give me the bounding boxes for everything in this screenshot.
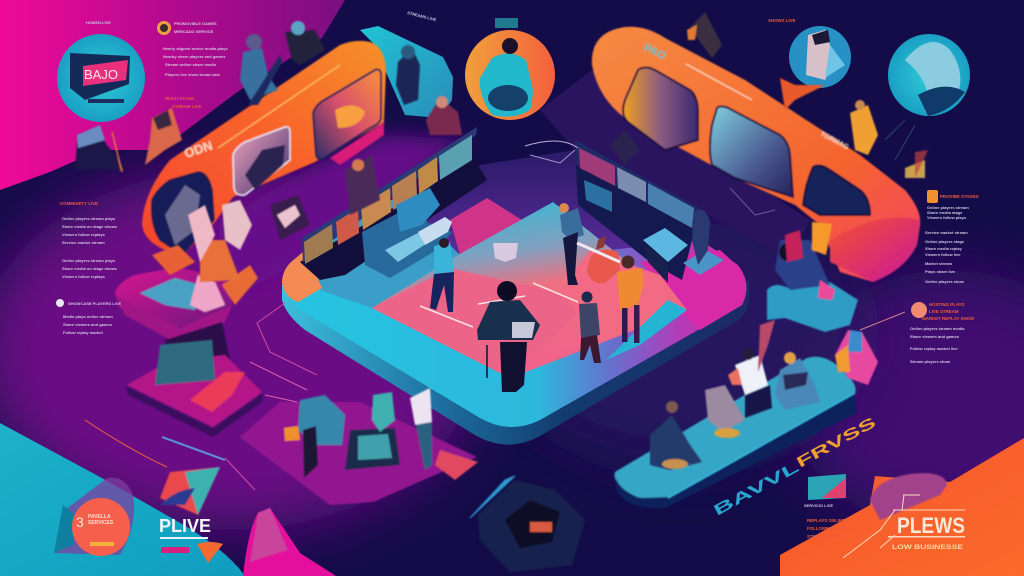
bench side — [615, 393, 857, 508]
floor right teal stripe — [606, 300, 687, 360]
monitor stand — [88, 99, 124, 103]
bus window: right — [313, 70, 381, 159]
lower figure sleeve — [848, 330, 862, 352]
console screen 3 — [361, 188, 391, 230]
bench light — [668, 393, 855, 498]
text block: right first — [925, 190, 979, 284]
text block: left mid first: Online players stream plays — [62, 216, 116, 221]
platform rim — [282, 280, 749, 445]
white panel — [418, 217, 452, 245]
orange box — [284, 426, 300, 441]
window figure: middle — [245, 145, 285, 190]
text block: left mid first: Share media on stage shows — [62, 224, 118, 229]
icon: bubble top-left monitor — [57, 34, 145, 122]
lower tray — [127, 355, 262, 427]
panel: left machine — [115, 265, 263, 437]
text: bottom left badge: 3 — [76, 514, 84, 530]
bus lettering two: TORMAG — [819, 131, 850, 152]
text block: right second: HOSTING PLAYS — [929, 302, 965, 307]
console frame — [575, 140, 703, 230]
lower device — [155, 340, 215, 385]
lower bus red glow — [330, 122, 384, 165]
person head — [502, 38, 518, 54]
icon: gem bottom — [250, 508, 288, 562]
person dark — [303, 426, 318, 478]
text block: left mid second: Media plays online stream — [63, 314, 113, 319]
desk unit — [362, 212, 452, 278]
text block: top-left info: Nearly aligned sevice media plays — [163, 46, 228, 51]
title: PLIVE logo: PLIVE — [159, 516, 211, 536]
icon: bubble top-right figure — [789, 26, 851, 88]
text block: bottom right panel — [804, 474, 851, 539]
text block: right first: Online players show — [925, 279, 965, 284]
text block: left mid second: SHOWCASE PLAYERS LIVE — [68, 301, 122, 306]
red slab — [190, 372, 245, 412]
text block: left mid first: COMMUNITY LIVE — [60, 201, 98, 206]
figure teal bus — [396, 48, 420, 105]
text block: left mid second: Share viewers and games — [63, 322, 113, 327]
red tile — [435, 450, 478, 480]
monitor screen — [83, 60, 128, 86]
person legs — [416, 422, 432, 470]
console screen 4 — [392, 171, 417, 210]
icon: people on bench — [650, 348, 820, 470]
text block: left mid second: Follow replay market — [63, 330, 103, 335]
floor white square — [493, 243, 518, 262]
text block: right first: Viewers follow live — [925, 252, 961, 257]
panel: console right — [575, 140, 724, 283]
console screen 3 — [648, 183, 694, 228]
text block: left mid first: Online players stream plays — [62, 258, 116, 263]
person lap — [488, 85, 528, 111]
text: bottom left badge — [54, 478, 134, 556]
pink limb — [818, 280, 835, 300]
text block: right second: MARKET REPLAY SHOW — [922, 316, 975, 321]
title: PLIVE logo — [159, 516, 223, 563]
bus window: middle — [710, 106, 793, 197]
icon: performer at piano — [477, 281, 540, 392]
teal bag — [298, 395, 345, 445]
panel: purple glow bottom center — [500, 200, 860, 460]
text: bottom left badge: PAVELLA — [88, 514, 111, 520]
arrow: connector lines — [85, 120, 915, 490]
chart: central platform — [282, 150, 749, 445]
console screen 5 — [418, 157, 438, 194]
tray front — [115, 295, 232, 345]
bus window: middle — [233, 127, 290, 195]
text block: bottom right panel: REPLAYS ONLINE — [807, 518, 845, 523]
title: PLEWS logo: PLEWS — [897, 513, 965, 538]
icon: bubble far-right — [888, 34, 970, 116]
big monitor — [396, 188, 440, 232]
text block: right second: Stream players show — [910, 359, 951, 364]
monitor label: BAJO — [84, 67, 118, 82]
icon: person teal left — [430, 238, 454, 312]
text block: right second — [910, 302, 975, 364]
icon: small device top center — [495, 18, 518, 28]
icon: person orange shirt — [617, 256, 644, 343]
bus window: far — [803, 166, 870, 215]
panel: left orange bus — [142, 41, 386, 258]
monitor — [70, 53, 130, 100]
figure torso — [775, 240, 830, 290]
panel: orange bottom-right corner — [780, 438, 1024, 576]
side step — [683, 250, 724, 275]
figure head — [779, 243, 797, 261]
icon: central bottom machine — [470, 476, 585, 572]
platform magenta right — [640, 250, 747, 330]
icon: figures near left crowd — [152, 155, 380, 282]
panel: teal bus top — [360, 26, 453, 118]
icon: right seated blue figure — [758, 222, 878, 385]
text block: top-left info: Stream online share media — [165, 62, 217, 67]
text block: top-left info: Players live show broad cast — [165, 72, 220, 77]
text: top labels: STREAMS LIVE — [407, 10, 437, 22]
text block: top-left info — [157, 21, 228, 109]
platform orange corner — [282, 250, 322, 302]
console box — [645, 245, 668, 283]
monitor screen — [358, 434, 392, 460]
text: floor lettering — [711, 414, 879, 519]
text block: right second: Share viewers and games — [910, 334, 960, 339]
text block: right first: Market stream — [925, 261, 953, 266]
floor white marks — [420, 283, 578, 327]
platform back — [400, 150, 740, 360]
text block: left mid first — [60, 201, 118, 279]
panel: purple crowd area under left bus — [215, 135, 470, 295]
text block: top-left info: MULTI STAGE — [165, 96, 194, 101]
platform floor — [372, 202, 687, 378]
text: top labels — [407, 10, 796, 23]
text: floor lettering: FRVSS — [794, 414, 879, 471]
icon: person grey — [579, 292, 601, 363]
text block: bottom right panel: STREAM BOARD — [807, 534, 843, 539]
panel: console left — [300, 127, 487, 280]
person near console — [692, 210, 710, 265]
red seat — [785, 230, 803, 262]
title: PLEWS logo: LOW BUSINESSE — [892, 545, 963, 551]
lower figure orange — [835, 345, 850, 372]
icon: coral chair on stage — [577, 236, 620, 283]
person torso — [480, 53, 533, 117]
person white — [410, 388, 432, 425]
console screen 2 — [336, 208, 359, 245]
figure pink — [426, 98, 462, 135]
icon: figures top right — [610, 12, 928, 178]
text block: left mid second — [56, 299, 122, 335]
panel: purple glow right — [790, 270, 1024, 530]
console desk — [643, 228, 688, 262]
bus lettering: PAO — [642, 42, 668, 63]
floor front wedge — [372, 268, 590, 378]
icon: person back stage — [559, 203, 584, 285]
text block: right first: PROVIBE STAGES — [940, 194, 979, 199]
panel: purple blob behind logo — [870, 473, 947, 520]
icon: bubble top-center person — [465, 30, 555, 120]
orange cushions — [222, 265, 258, 305]
figure teal bus head — [401, 45, 415, 59]
text block: top-left info: STREAM LIVE — [172, 104, 202, 109]
icon: gem left — [160, 467, 220, 515]
text block: right first: Viewers follow plays — [927, 215, 967, 220]
connector limb — [758, 320, 775, 372]
text block: right second: LIVE STREAM — [929, 309, 959, 314]
text block: top-left info: MERCADO SERVICE — [174, 29, 214, 34]
platform left teal — [305, 195, 460, 308]
panel: dark wedge behind right bus — [540, 70, 810, 260]
platform top — [282, 240, 746, 427]
bus highlight — [686, 64, 752, 100]
console screen 6 — [439, 135, 472, 180]
floor magenta back — [450, 198, 525, 255]
tray interior — [140, 278, 200, 310]
text: top labels: SHOWS LIVE — [768, 18, 796, 23]
console screen 2 — [617, 167, 646, 202]
console screen 1 — [304, 224, 333, 264]
panel: lower left table — [240, 388, 478, 505]
console frame — [302, 127, 477, 262]
pink lower body — [830, 218, 920, 282]
person teal — [372, 392, 395, 432]
text block: right second: Follow replay market live — [910, 346, 958, 351]
text: bottom left badge: SERVICES — [88, 520, 114, 526]
panel: teal bottom-left corner — [0, 423, 245, 576]
floor right pink — [560, 250, 687, 342]
text block: right first: Plays share live — [925, 269, 956, 274]
console stand — [576, 165, 695, 280]
window figure: right — [335, 105, 365, 128]
console lower — [584, 180, 612, 212]
person gun — [240, 48, 278, 100]
text block: right first: Share media stage — [927, 210, 963, 215]
column — [165, 322, 230, 365]
lower figure — [835, 330, 878, 385]
text block: bottom right panel: SERVICIO LIVE — [804, 503, 833, 508]
bus highlight — [218, 65, 340, 148]
text: floor lettering: BAVVL — [711, 459, 802, 519]
panel: magenta bottom patch — [243, 508, 336, 576]
panel: magenta top-left corner — [0, 0, 345, 190]
text block: left mid first: Viewers follow replays — [62, 232, 106, 237]
text block: right first: Service market stream — [925, 230, 968, 235]
orange limb — [812, 222, 832, 255]
console screen 1 — [579, 148, 615, 186]
pink figure — [190, 275, 225, 312]
lower tray edge — [126, 386, 263, 437]
icon: figure below bubble — [75, 125, 125, 172]
text block: right first: Online players stream — [927, 205, 969, 210]
bus window: left — [152, 172, 214, 255]
text block: left mid first: Viewers follow replays — [62, 274, 106, 279]
monitor — [345, 428, 400, 470]
text block: bottom right panel: FOLLOWERS MEDIA — [807, 526, 851, 531]
person face — [145, 108, 182, 165]
person cap — [285, 30, 325, 65]
text block: right second: Online players stream media — [910, 326, 965, 331]
icon: seated figures upper left — [145, 21, 462, 165]
person face dark — [153, 110, 172, 130]
text block: right first: Share media replay — [925, 246, 962, 251]
text block: left mid first: Service market stream — [62, 240, 105, 245]
text block: top-left info: Nearby share players and games — [163, 54, 226, 59]
text block: right first: Online players stage — [925, 239, 965, 244]
bus window: near — [623, 68, 698, 150]
panel: right orange bus — [592, 27, 920, 282]
text block: left mid first: Share media on stage shows — [62, 266, 118, 271]
desk top — [385, 233, 432, 262]
title: PLEWS logo — [843, 495, 965, 558]
console stand — [300, 160, 487, 280]
text block: top-left info: PROMOVIBLE GAMES — [174, 21, 217, 26]
window figure: left — [165, 185, 200, 245]
bus lettering: ODN — [182, 138, 214, 161]
panel: teal bench bottom right — [614, 357, 857, 508]
text block: top-left header: HOMEN LIVE — [86, 20, 111, 25]
panel: purple glow left — [0, 170, 480, 530]
